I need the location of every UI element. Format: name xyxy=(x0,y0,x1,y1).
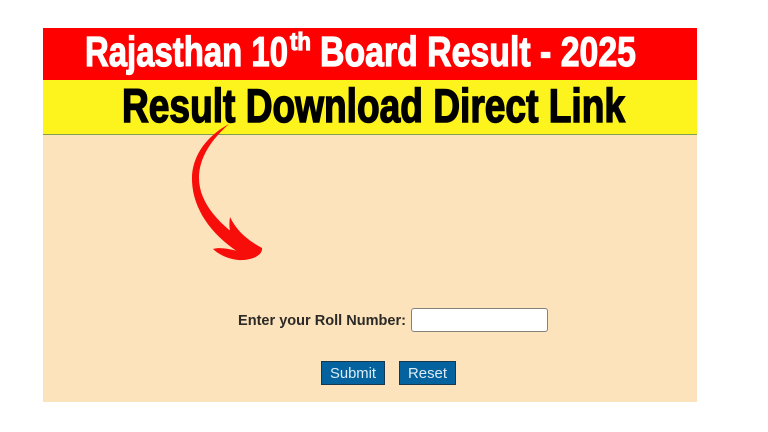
title xyxy=(85,28,636,75)
button: reset: Reset xyxy=(408,365,448,382)
arrow: red curved arrow pointing to form xyxy=(192,124,262,260)
form label: Enter your Roll Number: xyxy=(238,312,406,329)
title: Board Result - 2025 xyxy=(320,28,636,75)
title: Rajasthan 10 xyxy=(85,28,288,75)
button: reset xyxy=(400,362,456,384)
button: submit xyxy=(322,362,384,384)
panel: yellow subtitle banner xyxy=(43,80,697,134)
button: submit: Submit xyxy=(330,365,377,382)
title: th xyxy=(290,28,311,56)
text input: roll number xyxy=(412,308,548,332)
panel: result form background xyxy=(43,135,697,402)
subtitle: Result Download Direct Link xyxy=(122,79,626,132)
panel: red title banner xyxy=(43,28,697,80)
